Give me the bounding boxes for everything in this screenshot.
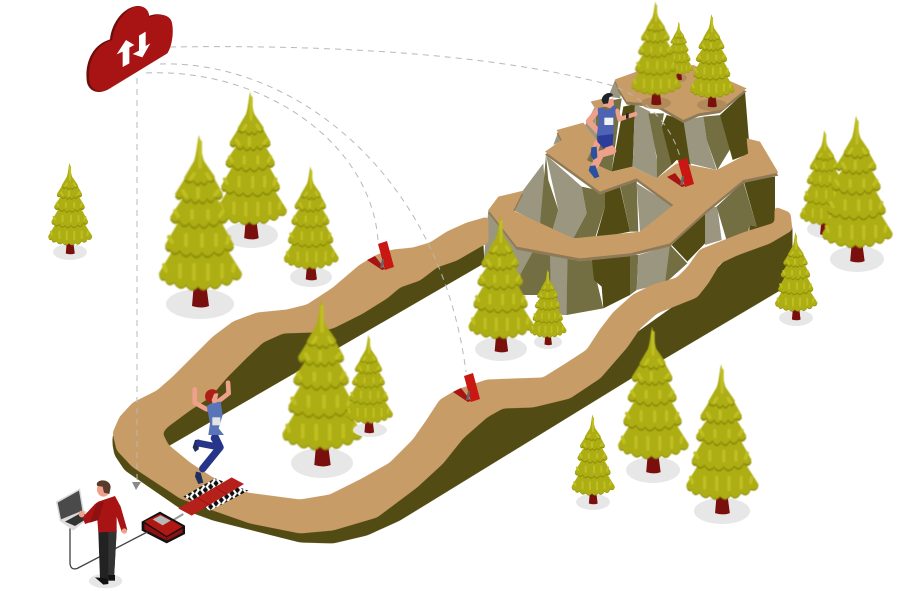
- tree: behind path: [284, 166, 339, 287]
- laptop: [56, 488, 93, 531]
- tree: right large: [822, 116, 893, 272]
- tree: far left small: [48, 163, 92, 260]
- tree: back left tall: [216, 92, 287, 248]
- timing mat: summit: [667, 158, 694, 187]
- technician: [79, 480, 127, 585]
- path side wall: lower band: [113, 225, 792, 543]
- tree: lower right small: [572, 415, 615, 510]
- male runner on the mountain: [589, 93, 635, 178]
- finish line checker: [178, 477, 248, 516]
- technician with laptop: [56, 480, 147, 588]
- finish mat: [178, 477, 244, 516]
- arrow: data to timing system: [132, 482, 141, 490]
- tree: right of mountain back: [800, 130, 851, 238]
- upper step: [591, 99, 607, 108]
- ledge edge: [488, 126, 778, 261]
- data lines from cloud: [137, 47, 680, 480]
- tree: foreground centre: [282, 300, 363, 478]
- tree: lower right large: [686, 364, 759, 524]
- tree: front of mountain small: [530, 269, 566, 349]
- female runner at the finish: [193, 383, 229, 484]
- mountain: [483, 65, 778, 315]
- plateau surface: [615, 65, 747, 120]
- path surface: [113, 207, 792, 533]
- timing mat: upper path: [367, 241, 394, 270]
- ledge surface: [488, 123, 778, 258]
- path side wall: upper band: [162, 245, 484, 446]
- tree: right small: [775, 232, 817, 326]
- tree: mountain top small: [665, 22, 693, 82]
- plateau edge: [615, 68, 747, 123]
- tree: foreground centre small: [346, 335, 393, 437]
- tree: large left: [159, 135, 242, 319]
- rock tier: middle: [514, 155, 674, 238]
- tree: mountain top left: [631, 2, 681, 109]
- tree: mountain top right: [690, 14, 735, 111]
- tree: front of mountain left: [469, 216, 534, 361]
- technician shadow: [89, 574, 122, 588]
- rock tier: lowest: [483, 177, 775, 315]
- tree: lower right medium: [618, 327, 689, 483]
- icon: cloud with transfer arrows: [86, 6, 173, 92]
- cables: [70, 528, 147, 569]
- timing mat: lower path: [453, 373, 480, 402]
- rock tier: upper: [553, 80, 750, 178]
- timing device: [142, 512, 185, 543]
